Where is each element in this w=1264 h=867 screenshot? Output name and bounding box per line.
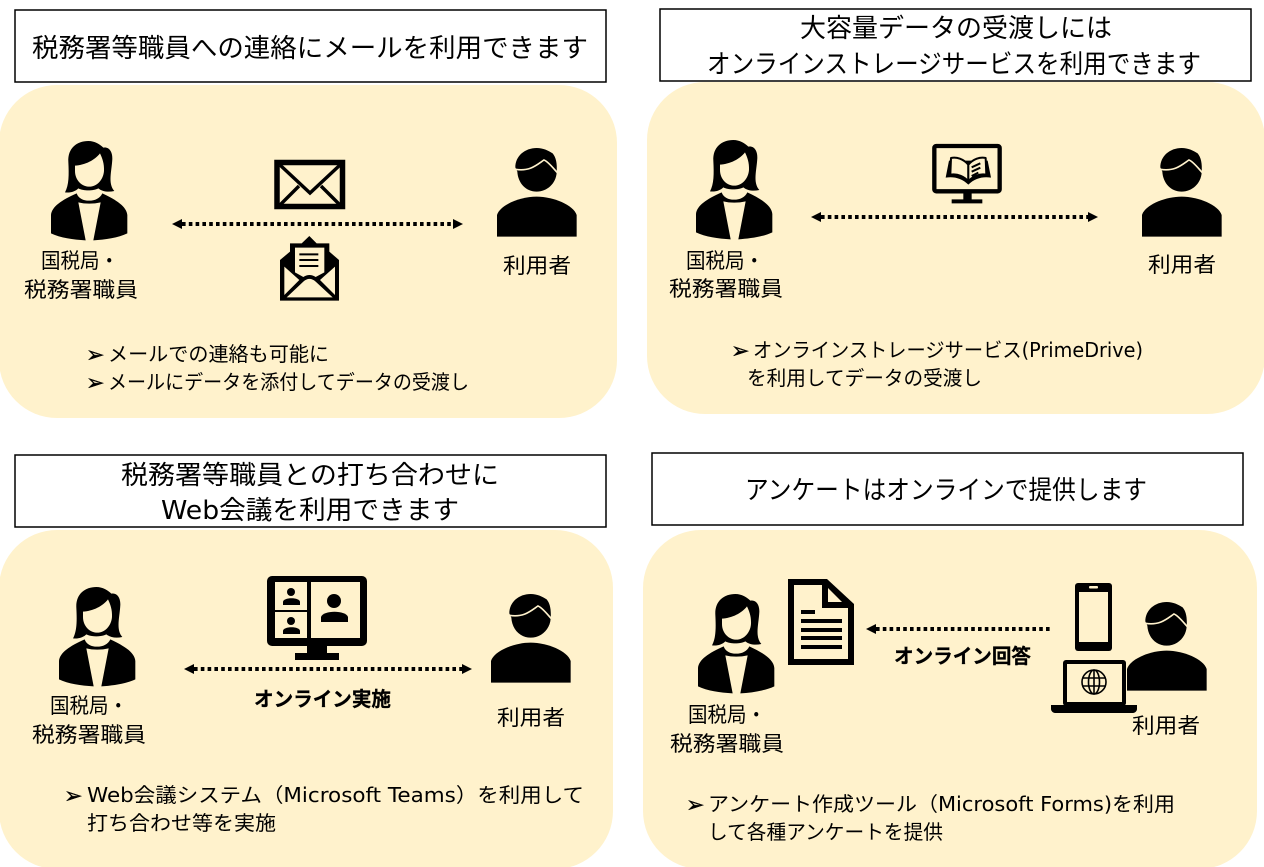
bullet text: ➢ (731, 339, 749, 364)
panel: online survey (643, 453, 1257, 867)
staff label: 税務署職員 (669, 278, 783, 301)
icon: laptop with globe (1051, 660, 1137, 713)
panel: online storage (647, 9, 1264, 414)
icon: document (788, 579, 854, 665)
bullet text (686, 792, 1175, 844)
icon: user (1142, 148, 1222, 237)
staff label (669, 250, 783, 301)
icon: closed envelope (277, 162, 342, 206)
arrow: survey response (866, 624, 1050, 634)
icon: monitor with video call (267, 576, 367, 660)
bullet text: ➢ (86, 343, 104, 368)
heading: 大容量データの受渡しには (800, 13, 1112, 43)
staff label: 税務署職員 (670, 733, 784, 756)
bullet text: して各種アンケートを提供 (708, 821, 943, 844)
icon: user (497, 148, 577, 237)
bullet text: メールにデータを添付してデータの受渡し (108, 371, 469, 394)
user label: 利用者 (497, 707, 565, 730)
bullet text: ➢ (686, 793, 704, 818)
staff label: 税務署職員 (24, 279, 138, 302)
panel background (0, 530, 613, 867)
user label: 利用者 (503, 255, 571, 278)
panel: email contact (0, 10, 617, 418)
user label: 利用者 (1148, 254, 1216, 277)
icon: staff (696, 140, 772, 239)
staff label: 国税局・ (686, 250, 764, 273)
panel background (643, 530, 1257, 867)
icon: staff (698, 594, 774, 693)
icon: user (1127, 602, 1207, 691)
bullet text: ➢ (86, 371, 104, 396)
heading: アンケートはオンラインで提供します (745, 475, 1147, 505)
heading: 税務署等職員との打ち合わせに (121, 460, 499, 490)
staff label: 税務署職員 (32, 724, 146, 747)
bullet text: を利用してデータの受渡し (747, 367, 982, 390)
bullet text (64, 783, 584, 835)
bullet text: Web会議システム（Microsoft Teams）を利用して (87, 783, 584, 807)
heading (15, 10, 606, 82)
bullet text: アンケート作成ツール（Microsoft Forms)を利用 (708, 792, 1175, 816)
staff label (24, 250, 138, 302)
icon: smartphone (1075, 583, 1112, 651)
bullet text: 打ち合わせ等を実施 (87, 812, 276, 835)
bullet text: メールでの連絡も可能に (108, 343, 329, 366)
staff label (670, 704, 784, 756)
user label: 利用者 (1132, 715, 1200, 738)
staff label: 国税局・ (688, 704, 766, 727)
heading: オンラインストレージサービスを利用できます (707, 49, 1201, 79)
staff label (32, 695, 146, 747)
heading: Web会議を利用できます (161, 496, 459, 526)
bullet text: ➢ (64, 784, 82, 809)
bullet text (731, 338, 1143, 390)
panel: web meeting (0, 455, 613, 867)
bullet text (86, 343, 469, 396)
arrow: two-way meeting (184, 664, 472, 674)
heading (652, 453, 1243, 525)
bullet text: オンラインストレージサービス(PrimeDrive) (753, 338, 1143, 362)
icon: staff (51, 141, 127, 240)
icon: staff (59, 587, 135, 686)
caption: オンライン回答 (894, 644, 1031, 668)
icon: user (491, 594, 571, 683)
arrow: two-way transfer (811, 212, 1098, 222)
staff label: 国税局・ (41, 250, 119, 273)
caption: オンライン実施 (254, 688, 391, 711)
heading (660, 9, 1251, 81)
icon: monitor with book (934, 146, 1000, 203)
panel background (0, 85, 617, 418)
arrow: two-way exchange (172, 219, 463, 229)
icon: open envelope (280, 236, 339, 301)
heading: 税務署等職員への連絡にメールを利用できます (32, 33, 588, 63)
staff label: 国税局・ (50, 695, 128, 718)
heading (15, 455, 606, 527)
panel background (647, 82, 1264, 414)
